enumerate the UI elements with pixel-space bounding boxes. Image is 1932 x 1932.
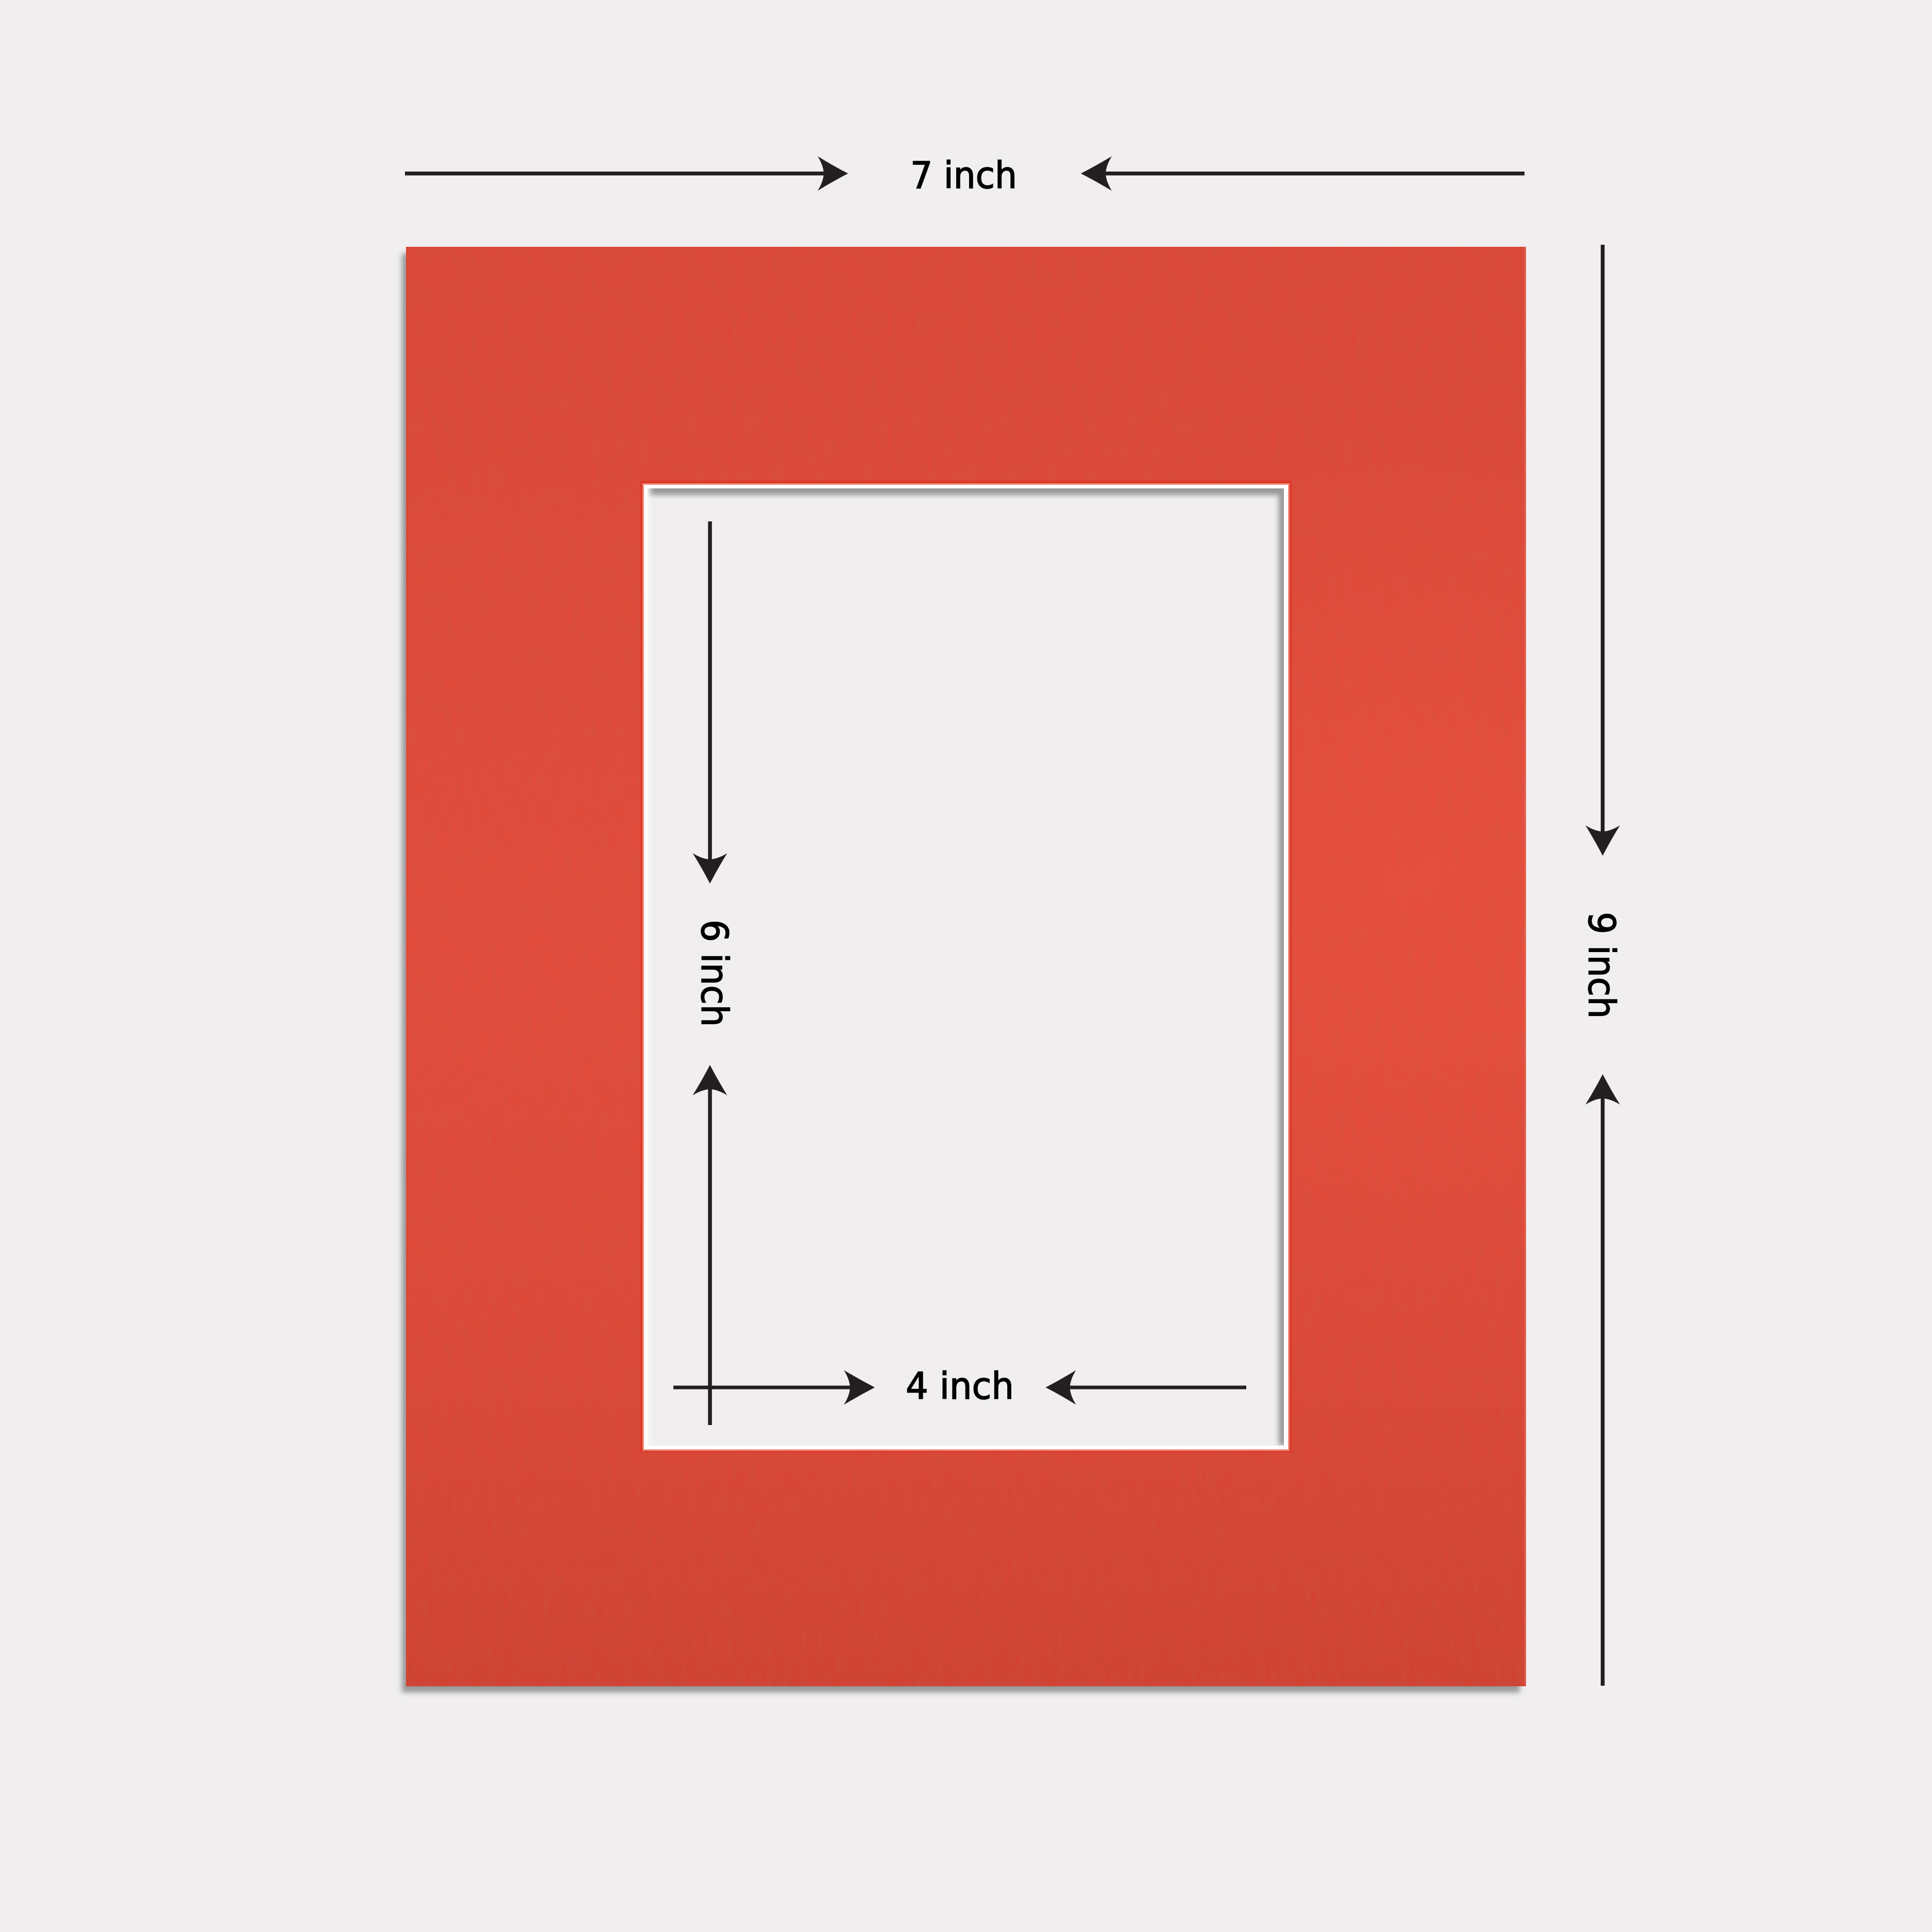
dimension: width 7 inch [405,154,1524,197]
arrow: right segment pointing left [1046,1370,1246,1404]
arrow: upper segment pointing down [1585,245,1620,856]
label: 6 inch: 6 inch [693,920,736,1027]
frame drop shadow [402,253,1520,1692]
window opening [640,479,1293,1452]
frame board [406,247,1526,1686]
arrow: lower segment pointing up [1585,1074,1620,1686]
dimension: opening width 4 inch [673,1365,1246,1408]
inner shadow top and right [650,479,1293,1446]
label: 9 inch: 9 inch [1580,912,1623,1019]
panel: red mat frame [402,247,1526,1692]
arrow: right segment pointing left [1081,156,1524,191]
arrow: upper segment pointing down [692,521,727,884]
dimension: height 9 inch [1580,245,1623,1686]
arrow: lower segment pointing up [692,1065,727,1425]
dimension: opening height 6 inch [692,521,736,1425]
label: 4 inch: 4 inch [906,1365,1014,1408]
arrow: left segment pointing right [673,1370,875,1404]
label: 7 inch: 7 inch [910,154,1017,197]
arrow: left segment pointing right [405,156,848,191]
